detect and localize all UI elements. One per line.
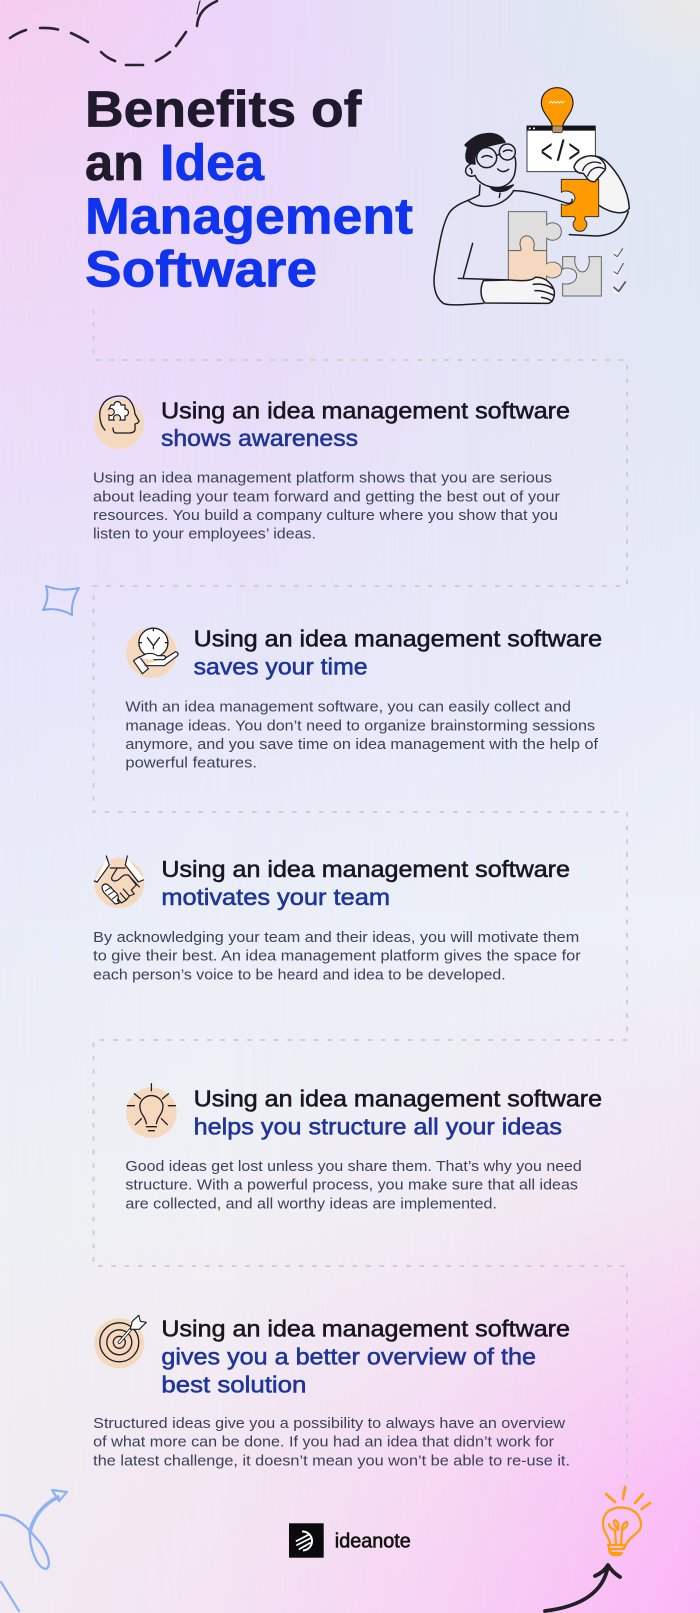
heading: Using an idea management software <box>194 1085 602 1111</box>
text block: structure. With a powerful process, you make sure that all ideas <box>125 1177 578 1194</box>
text block: Good ideas get lost unless you share them. That’s why you need <box>125 1158 582 1175</box>
heading: Using an idea management software <box>161 856 570 882</box>
illustration: hand holding window and piece <box>574 156 605 182</box>
title: Idea <box>160 134 265 191</box>
icon: head with puzzle <box>94 396 144 449</box>
text block: the latest challenge, it doesn’t mean you won’t be able to re-use it. <box>93 1452 570 1469</box>
icon: light bulb <box>126 1084 177 1138</box>
text block: about leading your team forward and getting the best out of your <box>93 488 560 505</box>
heading: Using an idea management software <box>194 626 602 652</box>
text block <box>93 1415 570 1469</box>
panel: saves your time <box>125 626 602 772</box>
text block <box>93 470 560 543</box>
panel: better overview <box>93 1315 570 1469</box>
heading: helps you structure all your ideas <box>194 1113 562 1139</box>
illustration: checklist ticks <box>613 249 625 294</box>
illustration: person assembling puzzle pieces <box>434 88 629 305</box>
illustration: right arm <box>587 156 629 213</box>
title: Software <box>85 241 317 298</box>
logo: ideanote: ideanote <box>335 1530 411 1552</box>
heading: best solution <box>161 1372 306 1398</box>
panel: helps you structure <box>125 1084 602 1212</box>
heading: motivates your team <box>161 884 390 910</box>
heading: Using an idea management software <box>161 397 570 423</box>
illustration: code window: / <box>557 136 565 168</box>
illustration: sweater outline <box>434 185 567 305</box>
text block: listen to your employees’ ideas. <box>93 526 316 543</box>
arrow: black curved arrow <box>545 1565 620 1611</box>
text block: Structured ideas give you a possibility to always have an overview <box>93 1415 565 1432</box>
illustration: peach puzzle piece <box>508 236 562 283</box>
icon: clock on hand <box>126 627 178 678</box>
title <box>85 81 413 298</box>
text block: anymore, and you save time on idea management with the help of <box>125 736 599 753</box>
decoration: blue star <box>43 586 79 615</box>
illustration: code window: < <box>541 133 553 170</box>
title: an <box>85 134 144 191</box>
text block: By acknowledging your team and their ideas, you will motivate them <box>93 929 579 946</box>
illustration: orange light bulb <box>541 88 573 133</box>
title: Benefits of <box>85 81 363 138</box>
decoration: dashed curve top <box>10 1 217 65</box>
text block: resources. You build a company culture where you show that you <box>93 507 558 524</box>
heading <box>161 856 570 910</box>
illustration: head and glasses <box>465 134 516 187</box>
illustration: lower hand <box>481 277 554 303</box>
text block: manage ideas. You don’t need to organize brainstorming sessions <box>125 717 595 734</box>
illustration: code window <box>527 126 595 172</box>
text block: of what more can be done. If you had an idea that didn’t work for <box>93 1434 554 1451</box>
illustration: gray puzzle piece right <box>563 257 601 296</box>
illustration: gray puzzle piece <box>508 212 561 251</box>
illustration: code window: > <box>568 133 580 170</box>
heading: shows awareness <box>161 425 358 451</box>
arrow: blue looping arrow <box>1 1490 67 1611</box>
illustration: orange puzzle piece <box>561 179 599 231</box>
heading <box>194 626 602 680</box>
text block: With an idea management software, you can easily collect and <box>125 699 571 716</box>
text block: are collected, and all worthy ideas are implemented. <box>125 1195 497 1212</box>
text block <box>125 699 599 772</box>
text block <box>93 929 581 983</box>
title: Management <box>85 187 413 244</box>
heading <box>194 1085 602 1139</box>
panel: shows awareness <box>93 396 570 543</box>
logo: ideanote <box>289 1523 411 1558</box>
icon: orange doodle bulb <box>603 1487 650 1555</box>
icon: target with arrow <box>94 1315 146 1368</box>
panel: motivates your team <box>93 856 581 983</box>
heading <box>161 397 570 451</box>
text block: to give their best. An idea management platform gives the space for <box>93 948 581 965</box>
heading: gives you a better overview of the <box>161 1344 536 1370</box>
heading: Using an idea management software <box>161 1316 570 1342</box>
text block: Using an idea management platform shows that you are serious <box>93 470 552 487</box>
heading <box>161 1316 570 1398</box>
icon: handshake <box>94 856 144 908</box>
text block: each person’s voice to be heard and idea to be developed. <box>93 966 506 983</box>
text block: powerful features. <box>125 755 257 772</box>
text block <box>125 1158 582 1212</box>
heading: saves your time <box>194 654 368 680</box>
